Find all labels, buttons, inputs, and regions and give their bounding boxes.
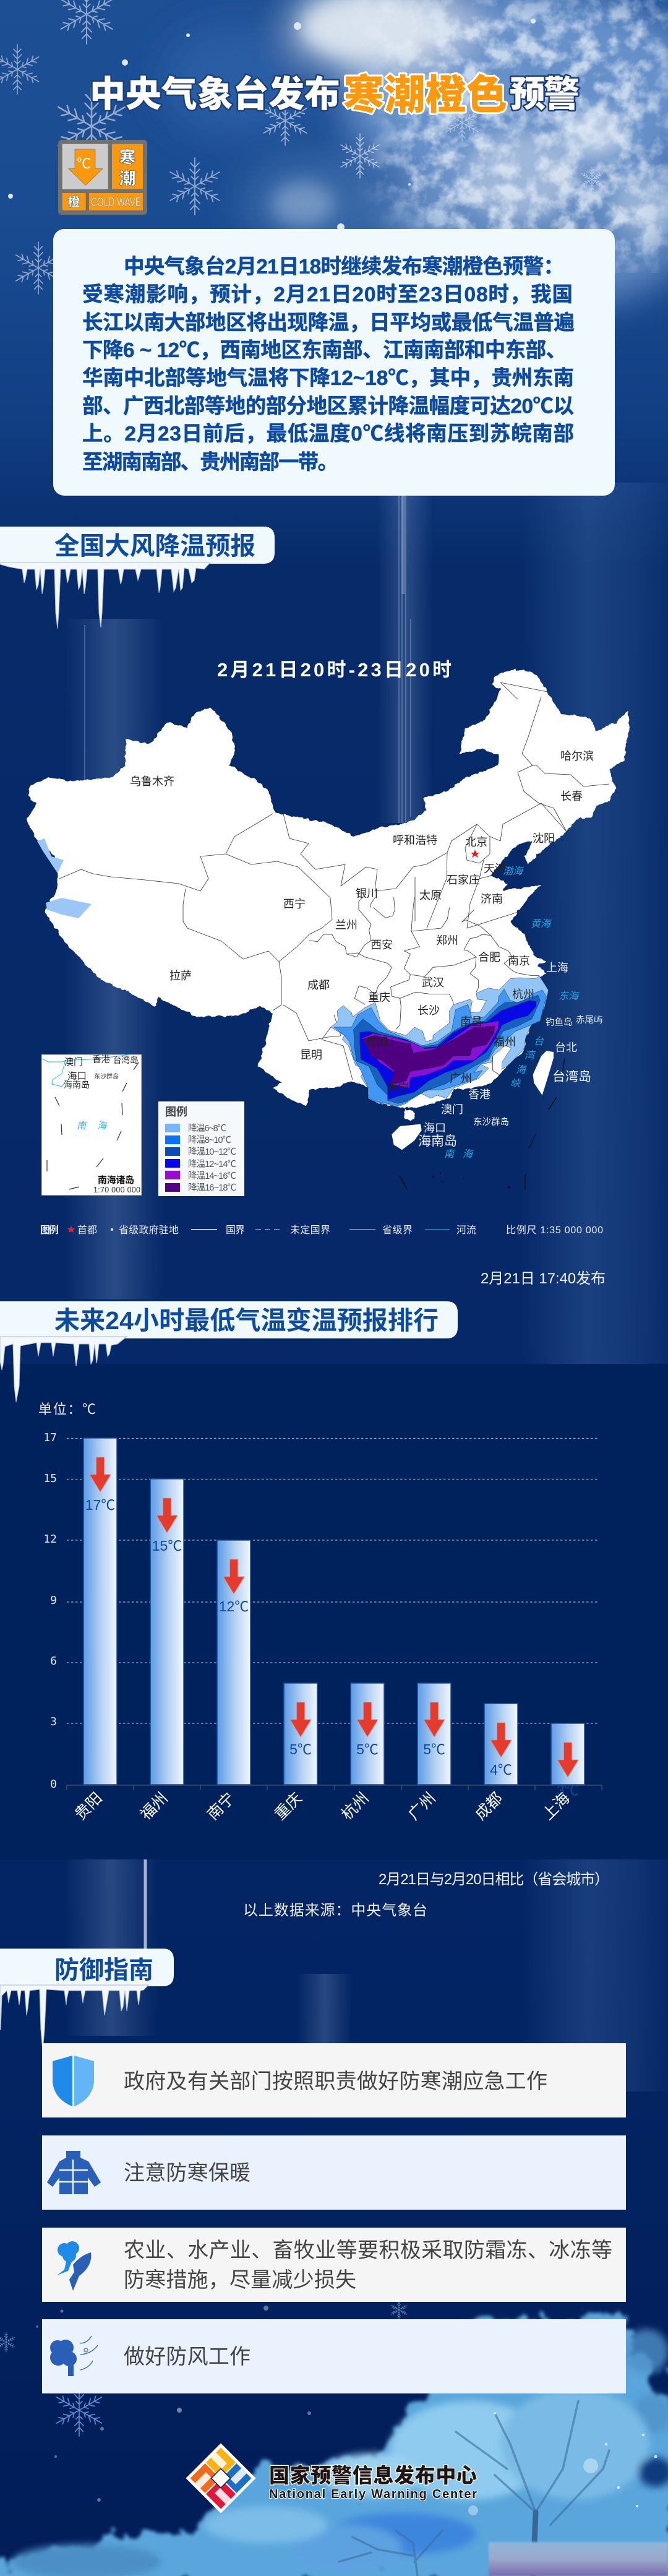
labels on sea: 渤海 [503, 866, 524, 877]
panel: forecast summary text: 长江以南大部地区将出现降温，日平均或最低气温普遍 [82, 312, 575, 334]
labels on sea: 海南岛 [418, 1134, 457, 1148]
icon: cold wave orange warning badge: ℃ [77, 155, 91, 171]
panel: keep warm: 注意防寒保暖 [124, 2161, 250, 2185]
inset: South China Sea islands [41, 1054, 142, 1195]
bar chart: temperature drop by city: 17 [43, 1431, 57, 1444]
heading: defence guide: 防御指南 [54, 1957, 153, 1984]
cooling contour bands [331, 976, 549, 1106]
inset: South China Sea islands: 南 [77, 1121, 87, 1131]
city labels on land: 石家庄 [447, 874, 480, 886]
legend: map symbols: 河流 [456, 1225, 476, 1236]
map date heading: 2月21日20时-23日20时 [217, 659, 452, 681]
bar chart: temperature drop by city: 杭州 [338, 1790, 372, 1824]
province boundaries west and north [59, 683, 609, 1080]
panel: agriculture protection [42, 2228, 626, 2302]
icon: cold wave orange warning badge: 橙 [68, 195, 80, 209]
labels on sea [418, 866, 602, 1160]
panel: forecast summary text [53, 229, 615, 496]
legend: map symbols [40, 1225, 603, 1236]
city labels on land: 哈尔滨 [560, 750, 594, 762]
city labels on land: 银川 [356, 887, 378, 900]
labels on sea: 东沙群岛 [473, 1117, 509, 1127]
city labels on land: 长沙 [417, 1004, 440, 1017]
bar chart: temperature drop by city: 12℃ [219, 1598, 249, 1614]
title: 寒潮橙色 [343, 72, 507, 118]
legend: cooling ranges: 降温10~12℃ [188, 1147, 236, 1157]
inset: South China Sea islands: 1:70 000 000 [93, 1186, 140, 1194]
panel: keep warm [42, 2135, 626, 2210]
legend: map symbols: 图例 [40, 1225, 59, 1236]
city labels on land: 成都 [307, 979, 330, 991]
panel: forecast summary text: 上。2月23日前后，最低温度0℃线将南压到苏皖南部 [82, 423, 574, 446]
labels on sea: 台北 [555, 1041, 577, 1054]
bar chart: temperature drop by city: 上海 [539, 1790, 573, 1824]
legend: cooling ranges: 降温14~16℃ [188, 1171, 236, 1181]
title: 预警 [510, 74, 580, 114]
city labels on land: 呼和浩特 [393, 834, 437, 846]
city labels on land: 合肥 [478, 951, 500, 963]
panel: agriculture protection: 防寒措施，尽量减少损失 [124, 2268, 356, 2292]
bar chart: temperature drop by city: 15℃ [152, 1538, 182, 1554]
legend: map symbols: 未定国界 [290, 1225, 330, 1236]
legend: map symbols: 省级政府驻地 [119, 1225, 179, 1236]
logo: National Early Warning Center: 国家预警信息发布中心 [269, 2464, 477, 2487]
legend: cooling ranges [158, 1101, 244, 1196]
legend: map symbols: 省级界 [382, 1225, 413, 1236]
city labels on land: 南昌 [460, 1015, 482, 1028]
city labels on land: 北京 [465, 836, 487, 848]
heading: next 24h minimum temperature ranking [0, 1301, 458, 1402]
capital star [471, 850, 479, 858]
city labels on land: 乌鲁木齐 [130, 775, 174, 788]
labels on sea: 上海 [546, 962, 568, 974]
bar chart: temperature drop by city: 5℃ [289, 1741, 312, 1757]
city labels on land: 武汉 [422, 976, 444, 989]
icon: cold wave orange warning badge: 潮 [119, 170, 136, 188]
heading: next 24h minimum temperature ranking: 未来24小时最低气温变温预报排行 [54, 1306, 439, 1335]
inset: South China Sea islands: 澳门 [64, 1057, 83, 1067]
icon: tree in wind [50, 2336, 98, 2376]
icon: cold wave orange warning badge [58, 140, 147, 215]
mainland outline [27, 670, 629, 1122]
icon: cold wave orange warning badge: 寒 [119, 148, 136, 167]
heading: national wind and cooling forecast: 全国大风降温预报 [54, 532, 255, 560]
logo: National Early Warning Center: National Early Warning Center [269, 2488, 477, 2501]
bar chart: temperature drop by city: 0 [50, 1778, 57, 1791]
city labels on land [130, 750, 594, 1094]
panel: forecast summary text: 部、广西北部等地的部分地区累计降温幅度可达20℃以 [82, 395, 574, 418]
bar chart: temperature drop by city: 4℃ [490, 1762, 512, 1778]
icon: shield [53, 2056, 94, 2106]
labels on sea: 台 [534, 1036, 544, 1047]
nine-dash line [400, 1058, 565, 1189]
labels on sea: 澳门 [441, 1103, 463, 1116]
inset: South China Sea islands: 海南岛 [64, 1080, 90, 1090]
labels on sea: 香港 [468, 1088, 490, 1101]
legend: cooling ranges: 降温8~10℃ [188, 1135, 231, 1145]
title [90, 72, 580, 118]
city labels on land: 西宁 [283, 898, 306, 910]
bar chart: temperature drop by city: 6 [50, 1655, 57, 1668]
frost photo at top [0, 0, 668, 309]
inset: South China Sea islands: 海口 [67, 1070, 87, 1082]
inset: South China Sea islands: 东沙群岛 [94, 1072, 119, 1080]
city labels on land: 太原 [419, 889, 442, 902]
city labels on land: 拉萨 [169, 970, 192, 982]
city labels on land: 长春 [560, 790, 583, 803]
city labels on land: 昆明 [300, 1049, 322, 1061]
legend: map symbols: 首都 [77, 1225, 97, 1236]
panel: government response [42, 2043, 626, 2117]
bar chart: temperature drop by city: 12 [43, 1533, 57, 1546]
labels on sea: 峡 [510, 1078, 521, 1089]
city labels on land: 杭州 [512, 988, 534, 1001]
bottom tree illustration [0, 2301, 668, 2576]
inset: South China Sea islands: 南海诸岛 [98, 1174, 134, 1186]
panel: forecast summary text: 受寒潮影响，预计，2月21日20时至23日08时，我国 [82, 283, 573, 306]
labels on sea: 钓鱼岛 [546, 1017, 573, 1028]
panel: wind protection: 做好防风工作 [124, 2345, 250, 2369]
bar chart: temperature drop by city: 贵阳 [72, 1790, 106, 1824]
inset: South China Sea islands: 香港 [92, 1054, 110, 1065]
city labels on land: 济南 [481, 893, 503, 905]
panel: agriculture protection: 农业、水产业、畜牧业等要积极采取防霜冻、冰冻等 [124, 2239, 612, 2262]
panel: government response: 政府及有关部门按照职责做好防寒潮应急工作 [124, 2070, 547, 2093]
city labels on land: 郑州 [436, 934, 458, 947]
city labels on land: 重庆 [368, 991, 390, 1004]
lakes [37, 838, 92, 918]
bar chart: temperature drop by city: 3℃ [557, 1782, 579, 1798]
bar chart: temperature drop by city: 17℃ [85, 1497, 115, 1513]
icon: tree and fish [57, 2241, 91, 2291]
bar chart: temperature drop by city: 15 [43, 1472, 57, 1485]
labels on sea: 海 [463, 1148, 474, 1160]
heading: defence guide [0, 1949, 174, 2051]
bar chart: temperature drop by city: 广州 [405, 1790, 439, 1824]
legend: cooling ranges: 降温12~14℃ [188, 1159, 236, 1170]
bar chart: temperature drop by city: 重庆 [272, 1790, 306, 1824]
labels on sea: 黄海 [531, 918, 552, 929]
bar chart: temperature drop by city [38, 1402, 602, 1824]
logo: National Early Warning Center [187, 2445, 477, 2512]
title: 中央气象台发布 [90, 74, 340, 114]
chart panel background [0, 1364, 668, 1859]
city labels on land: 天津 [484, 863, 506, 875]
bar chart: temperature drop by city: 南宁 [204, 1790, 238, 1824]
city labels on land: 广州 [450, 1072, 472, 1085]
panel: forecast summary text: 中央气象台2月21日18时继续发布寒潮橙色预警： [124, 255, 564, 278]
labels on sea: 东海 [559, 991, 580, 1002]
inset: South China Sea islands: 海 [97, 1121, 108, 1131]
panel: forecast summary text: 华南中北部等地气温将下降12~18℃，其中，贵州东南 [82, 367, 574, 390]
chart note: 2月21日与2月20日相比（省会城市） [379, 1871, 609, 1888]
city labels on land: 福州 [494, 1036, 516, 1048]
province boundaries centre [309, 897, 539, 1088]
map: China cooling forecast [27, 670, 629, 1189]
labels on sea: 台湾岛 [552, 1070, 591, 1084]
icon: cold wave orange warning badge: COLD WAVE [91, 196, 141, 209]
panel: forecast summary text: 下降6 ~ 12℃，西南地区东南部、江南南部和中东部、 [82, 339, 567, 362]
labels on sea: 赤尾屿 [576, 1015, 602, 1025]
bar chart: temperature drop by city: 5℃ [423, 1741, 445, 1757]
bar chart: temperature drop by city: 5℃ [356, 1741, 379, 1757]
panel: wind protection [42, 2319, 626, 2393]
panel: forecast summary text: 至湖南南部、贵州南部一带。 [82, 451, 338, 474]
city labels on land: 南宁 [387, 1082, 409, 1094]
legend: cooling ranges: 图例 [165, 1106, 187, 1118]
labels on sea: 海 [516, 1064, 527, 1075]
icon: padded jacket [47, 2151, 101, 2194]
city labels on land: 西安 [370, 939, 393, 951]
city labels on land: 兰州 [335, 919, 358, 931]
bar chart: temperature drop by city: 9 [50, 1594, 57, 1607]
heading: national wind and cooling forecast [0, 527, 275, 629]
bar chart: temperature drop by city: 福州 [137, 1790, 171, 1824]
city labels on land: 沈阳 [533, 832, 555, 845]
bar chart: temperature drop by city: 单位：℃ [38, 1402, 96, 1417]
Taiwan and Hainan islands [392, 1051, 554, 1150]
legend: cooling ranges: 降温6~8℃ [188, 1123, 226, 1134]
legend: map symbols: 国界 [226, 1225, 245, 1236]
legend: cooling ranges: 降温16~18℃ [188, 1182, 236, 1193]
bar chart: temperature drop by city: 3 [50, 1715, 57, 1728]
city labels on land: 贵阳 [366, 1036, 388, 1048]
data source: 以上数据来源：中央气象台 [243, 1902, 427, 1919]
legend: map symbols: 比例尺 1:35 000 000 [506, 1225, 603, 1236]
labels on sea: 海口 [424, 1122, 446, 1134]
city labels on land: 南京 [508, 955, 530, 967]
bar chart: temperature drop by city: 成都 [472, 1790, 506, 1824]
publish time: 2月21日 17:40发布 [481, 1270, 606, 1287]
labels on sea: 湾 [525, 1050, 536, 1061]
inset: South China Sea islands: 台湾岛 [113, 1055, 139, 1065]
labels on sea: 南 [444, 1148, 456, 1160]
